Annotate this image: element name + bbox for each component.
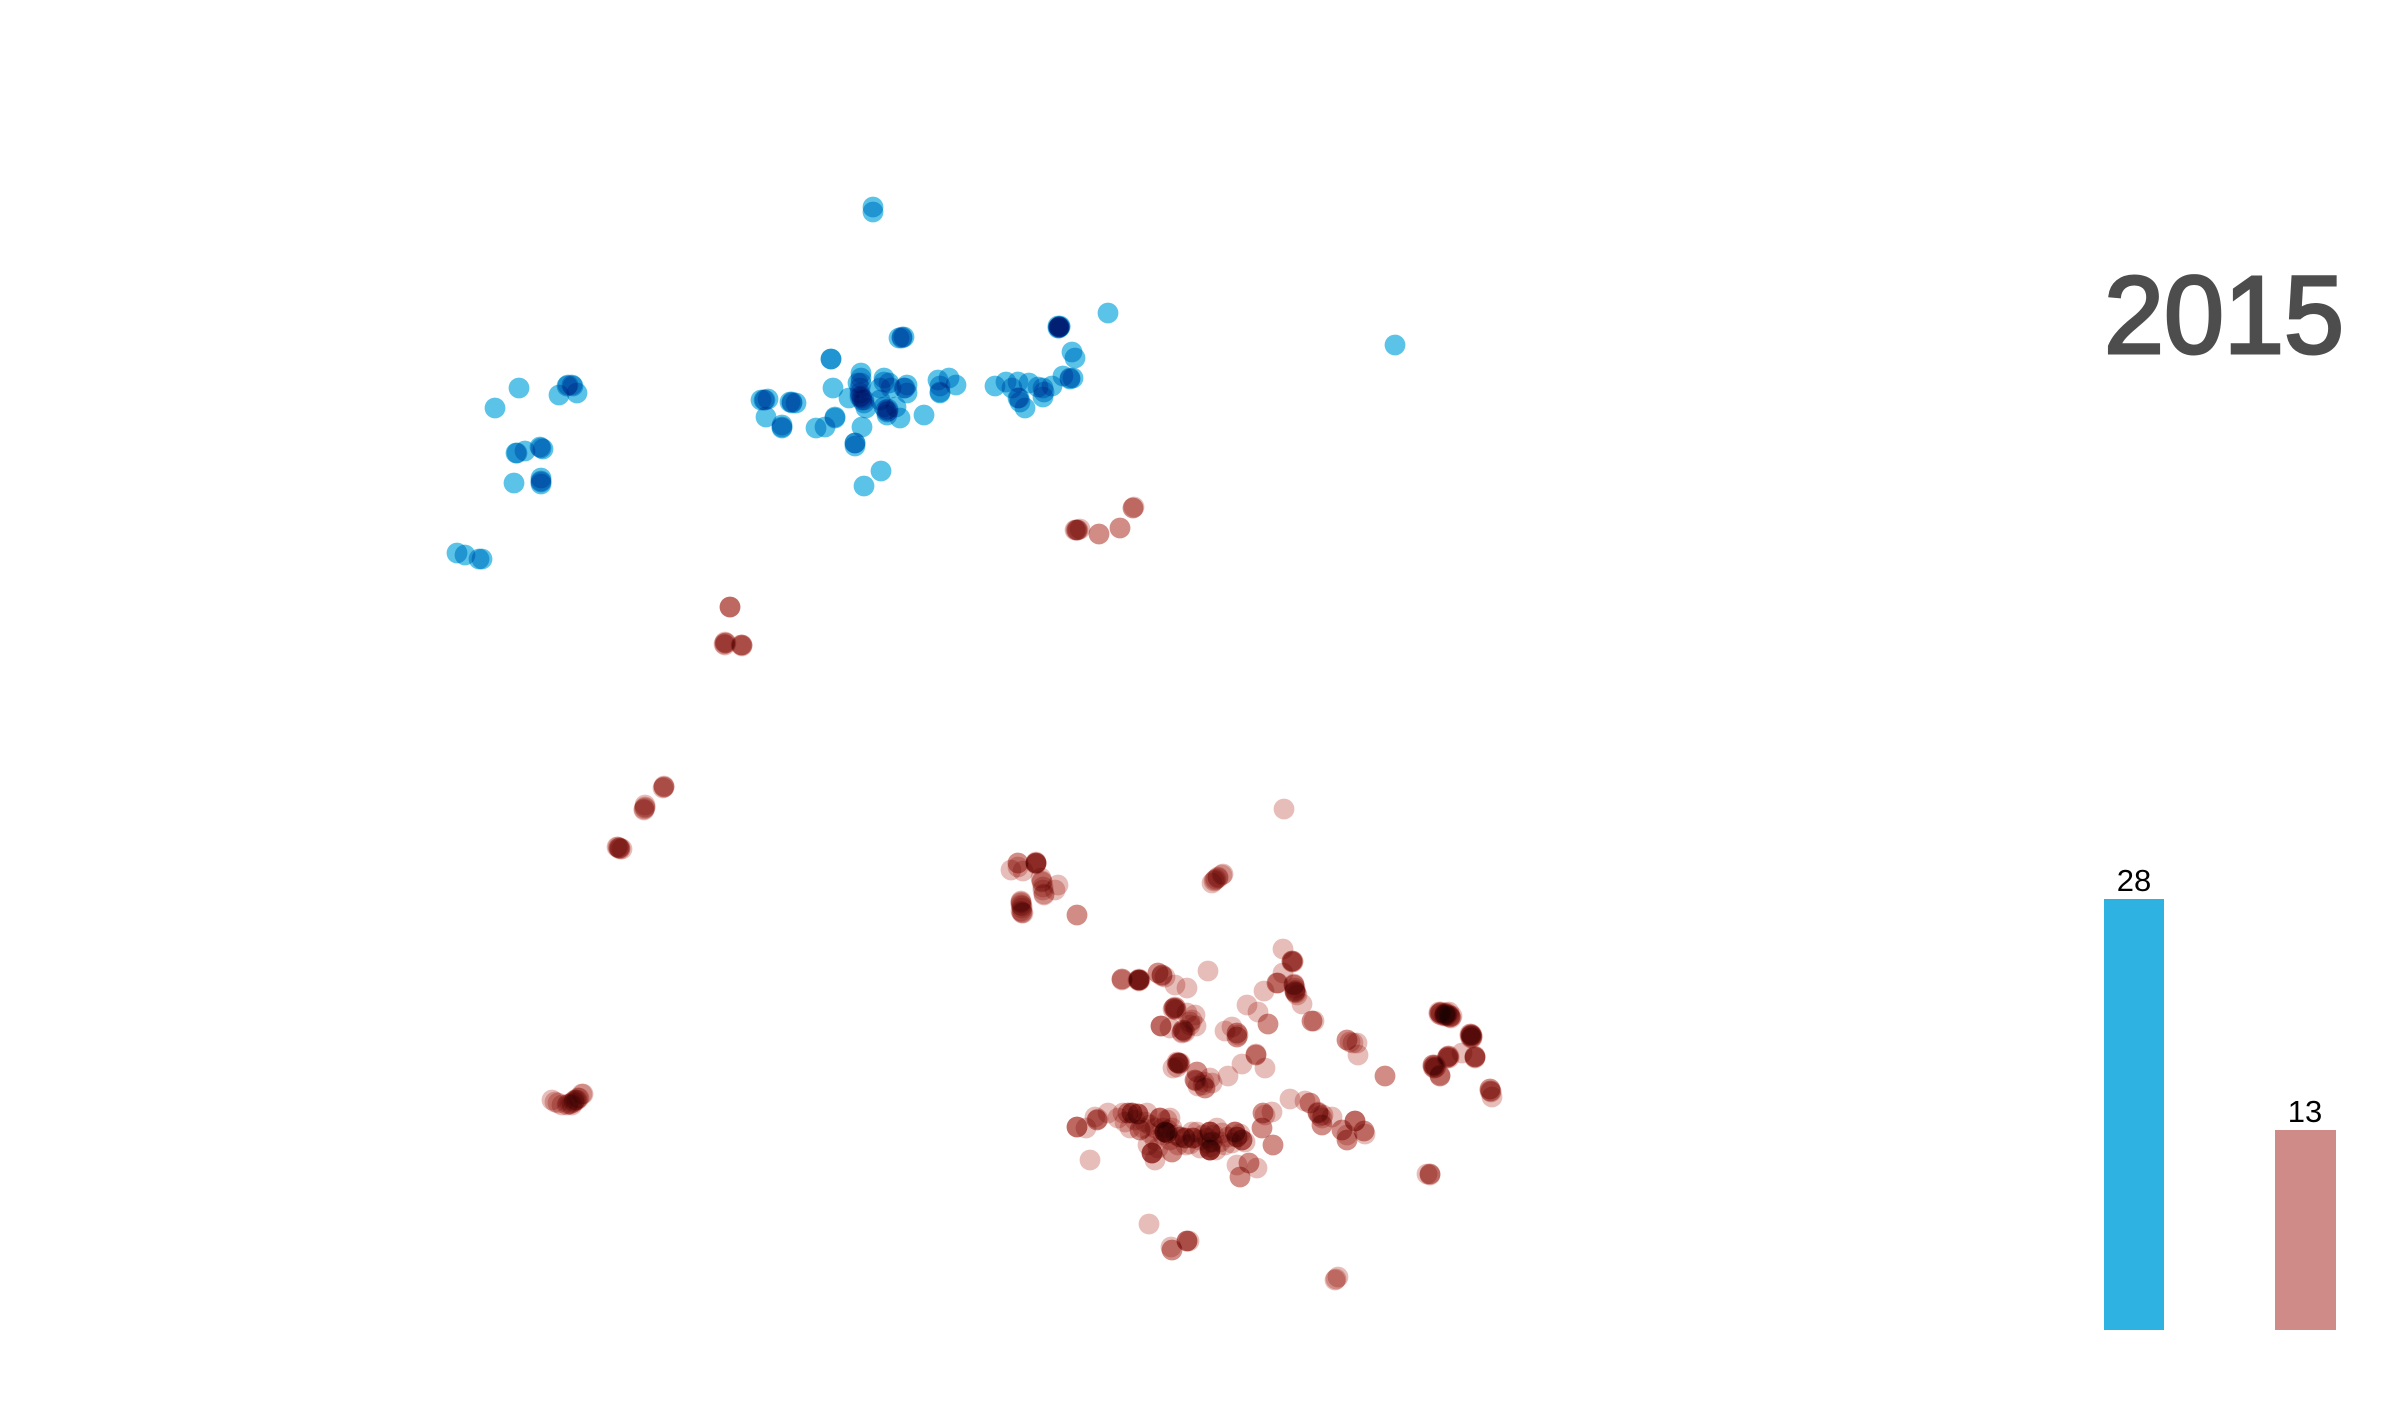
bar: blue count 28: 28 <box>2117 863 2151 898</box>
bar: red count 13 <box>2275 1094 2336 1330</box>
bar: blue count 28 <box>2104 863 2164 1330</box>
year label: 2015 <box>2104 254 2344 377</box>
scatter: red points <box>542 497 1502 1290</box>
bar: red count 13: 13 <box>2288 1094 2322 1129</box>
scatter: blue points <box>447 197 1405 569</box>
